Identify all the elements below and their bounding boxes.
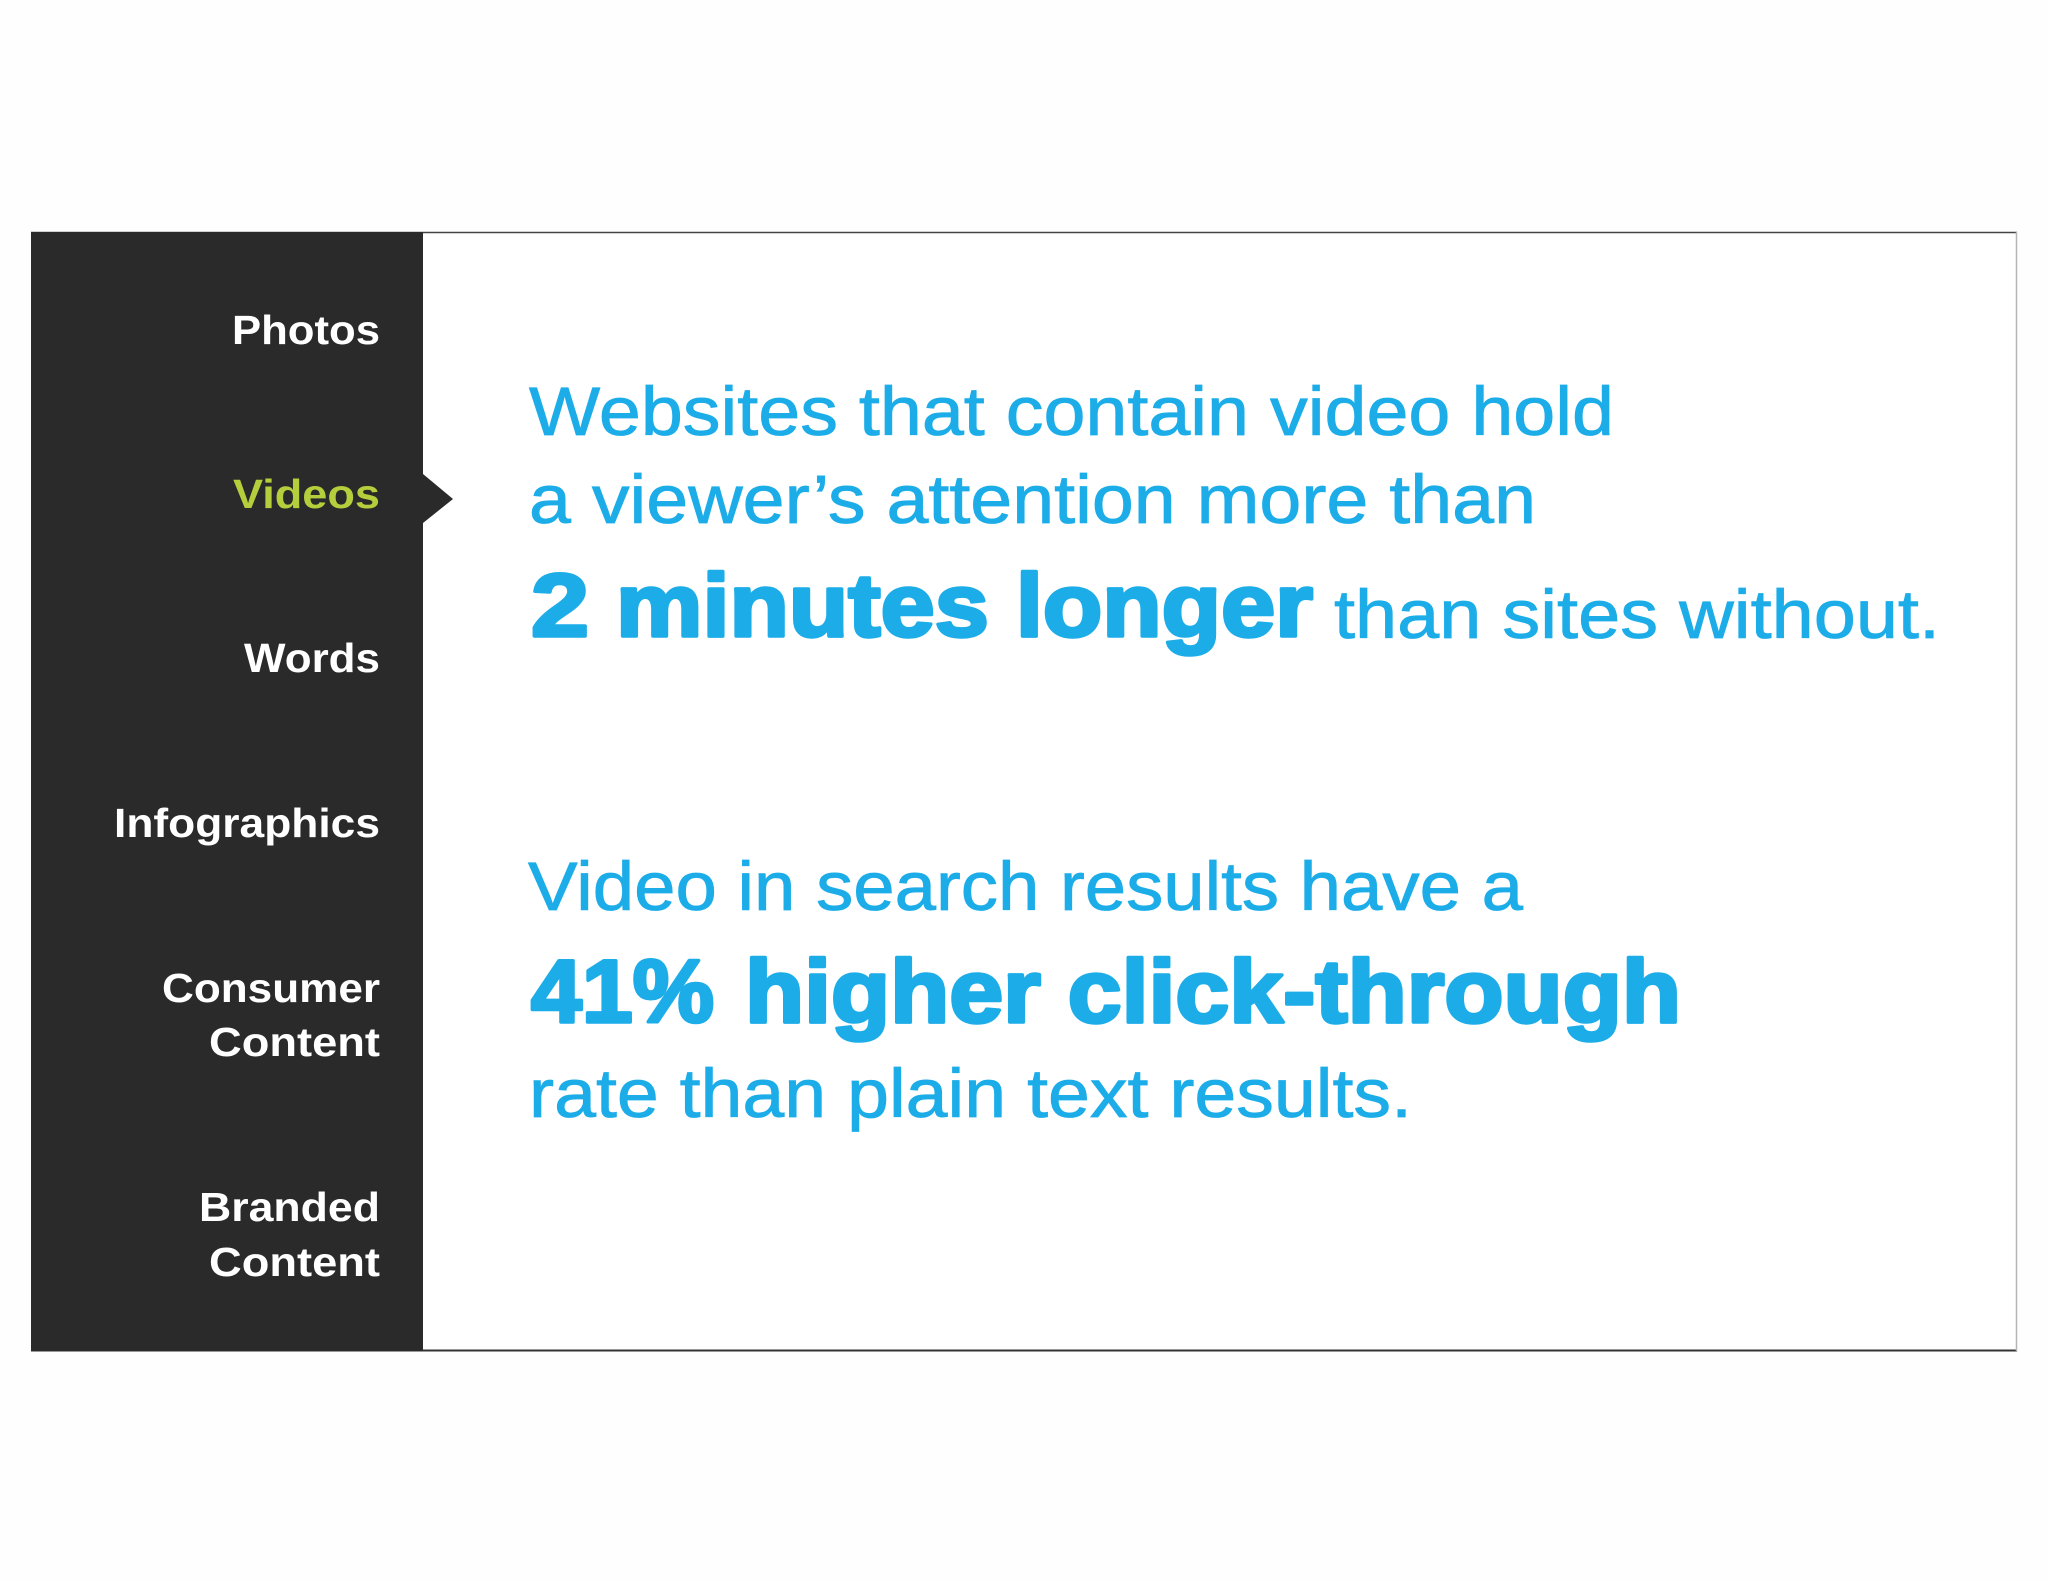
nav item: Consumer Content: [162, 965, 380, 1065]
text block: website attention statistic: [529, 373, 1940, 655]
icon: active item arrow: [423, 474, 453, 523]
nav item: Photos: Photos: [232, 307, 380, 353]
nav item: Branded Content: Branded: [199, 1184, 380, 1230]
nav item: Words: Words: [244, 635, 380, 681]
nav item: Infographics: Infographics: [114, 800, 380, 846]
panel: slide frame: [31, 232, 2017, 1351]
nav item: Consumer Content: Consumer: [162, 965, 380, 1011]
nav item: Branded Content: Content: [209, 1239, 380, 1285]
text block: website attention statistic: Websites that contain video hold: [529, 373, 1614, 450]
nav item: Videos (active): Videos: [233, 471, 380, 517]
text block: website attention statistic: minutes longer: [616, 555, 1313, 655]
text block: click-through statistic: 41%: [531, 941, 714, 1041]
text block: click-through statistic: [528, 848, 1681, 1132]
nav item: Consumer Content: Content: [209, 1019, 380, 1065]
panel: sidebar navigation: [31, 232, 453, 1351]
text block: click-through statistic: higher click-through: [745, 941, 1681, 1041]
text block: click-through statistic: rate than plain text results.: [529, 1055, 1412, 1132]
nav item: Branded Content: [199, 1184, 380, 1285]
text block: website attention statistic: a viewer’s attention more than: [529, 461, 1536, 538]
text block: website attention statistic: 2: [531, 555, 589, 655]
text block: website attention statistic: than sites without.: [1334, 576, 1940, 653]
text block: click-through statistic: Video in search results have a: [528, 848, 1524, 925]
